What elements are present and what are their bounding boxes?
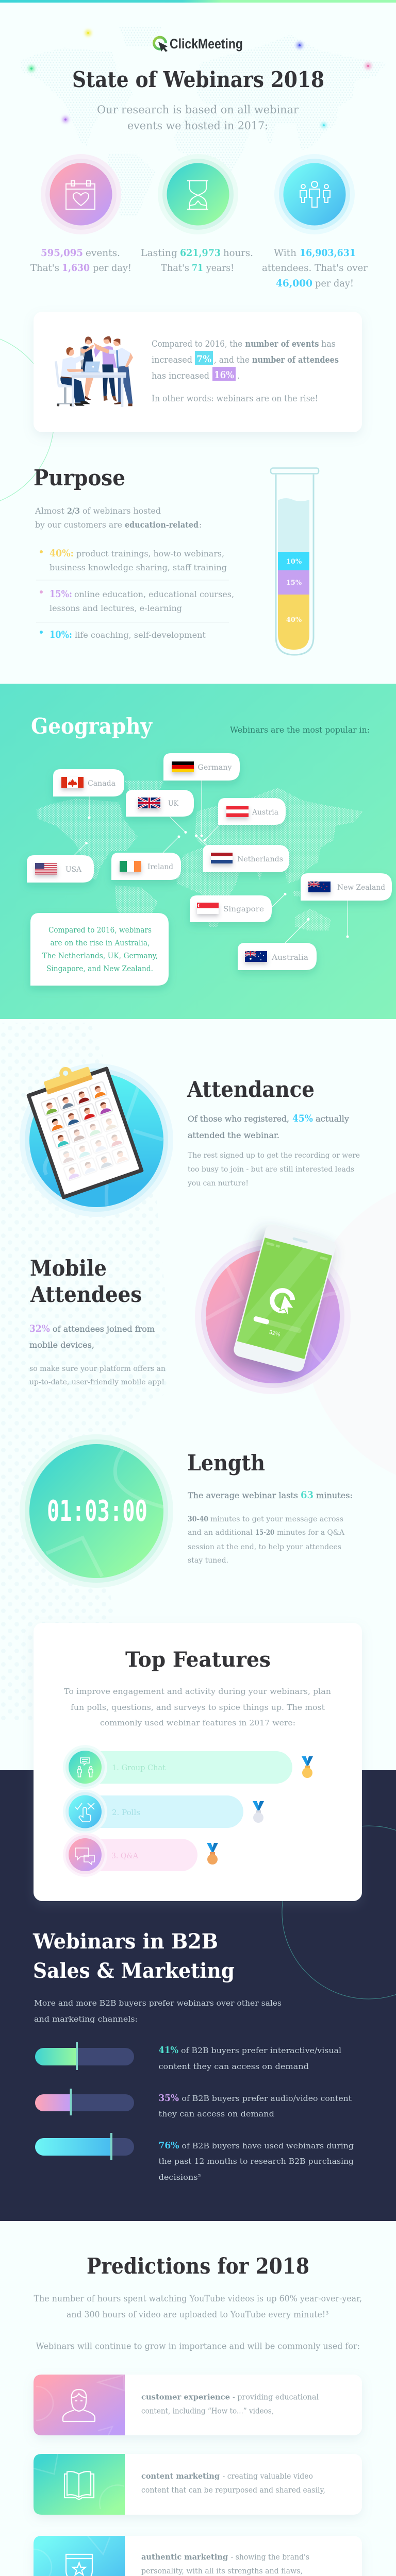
callout: rising countries (30, 913, 169, 986)
icon: person (63, 2389, 95, 2421)
lead text (188, 1113, 349, 1140)
card: customer experience (34, 2375, 362, 2435)
icon: three people (274, 154, 355, 234)
glowing map dots (28, 30, 371, 128)
lead text: 32% (29, 1323, 50, 1334)
detail text: up-to-date, user-friendly mobile app! (29, 1378, 164, 1386)
country: New Zealand (301, 873, 392, 901)
country: Austria (218, 798, 286, 825)
lead text: The average webinar lasts (188, 1490, 298, 1500)
comparison text: has increased (152, 371, 209, 381)
stat text: 76% (159, 2140, 354, 2182)
icon: hourglass (158, 154, 238, 234)
country: Canada (53, 769, 124, 796)
stat text: 35%: 35% (159, 2093, 179, 2104)
subtitle (97, 104, 299, 132)
stat text: hours: 621,973 (180, 247, 221, 259)
feature bar: polls (63, 1790, 264, 1834)
stat text: events: 1,630 (62, 262, 90, 274)
logo: ClickMeeting (170, 36, 243, 52)
stat text: attendees: 16,903,631 (300, 247, 356, 259)
panel: comparison card (34, 312, 362, 432)
card: authentic marketing: authentic marketing (141, 2552, 228, 2562)
stat text: 35%: they can access on demand (159, 2109, 274, 2119)
feature bar: polls: 2. Polls (112, 1808, 140, 1817)
callout: rising countries: The Netherlands, UK, Germany, (42, 951, 158, 960)
comparison text: In other words: webinars are on the rise! (152, 394, 318, 403)
intro text: commonly used webinar features in 2017 were: (100, 1718, 295, 1727)
lead text: minutes: (316, 1490, 353, 1500)
feature bar: Q&A (63, 1833, 218, 1877)
heading: Geography (31, 714, 153, 739)
country: Ireland (111, 853, 181, 880)
intro text: fun polls, questions, and surveys to spice things up. The most (71, 1703, 325, 1712)
stat text: 76%: the past 12 months to research B2B purchasing (159, 2157, 354, 2166)
intro text (35, 506, 202, 530)
panel: top features (34, 1623, 362, 1901)
intro text: and marketing channels: (34, 2014, 138, 2024)
card: content marketing: - creating valuable video (223, 2471, 313, 2481)
illustration: digital clock on green circle (20, 1434, 173, 1588)
stat text: 41%: of B2B buyers prefer interactive/visual (181, 2046, 341, 2055)
country: Canada: Canada (88, 779, 116, 788)
card: authentic marketing: personality, with all its strengths and flaws, (141, 2566, 303, 2575)
heading (32, 1929, 235, 1983)
feature bar: group chat: 1. Group Chat (112, 1763, 166, 1772)
detail text: The rest signed up to get the recording or were (188, 1151, 360, 1160)
stat text: hours (141, 247, 253, 274)
test tube chart (271, 468, 319, 655)
list item: 10%: 10%: (50, 629, 72, 640)
country: UK (126, 790, 194, 817)
stat text: attendees (262, 247, 368, 289)
panel: stat attendees (262, 154, 368, 289)
card: content marketing (34, 2454, 362, 2515)
detail text: and an additional (188, 1529, 253, 1537)
panel: predictions (0, 2253, 396, 2576)
panel: stat events (30, 154, 131, 274)
intro text: by our customers are (35, 520, 122, 530)
intro text: of webinars hosted (82, 506, 161, 516)
stat text: 41% (159, 2045, 341, 2071)
country: USA (27, 855, 94, 883)
detail text: too busy to join - but are still interested leads (188, 1165, 354, 1174)
country: Singapore (190, 895, 272, 922)
stat text: attendees: attendees. That's over (262, 262, 368, 274)
list item: 40%: product trainings, how-to webinars, (76, 549, 224, 558)
list item: 15%: lessons and lectures, e-learning (50, 604, 182, 613)
intro text: The number of hours spent watching YouTube videos is up 60% year-over-year, (34, 2294, 362, 2304)
icon: gold medal (302, 1756, 313, 1778)
test tube chart: 10% (286, 558, 302, 566)
comparison text: increased (152, 355, 192, 365)
feature bar: group chat (63, 1745, 313, 1789)
test tube chart: 15% (286, 579, 302, 587)
card: customer experience: - providing educational (233, 2393, 319, 2402)
country: Netherlands: Netherlands (237, 855, 283, 863)
country: New Zealand: New Zealand (337, 884, 385, 892)
detail text: so make sure your platform offers an (29, 1365, 166, 1373)
icon: open book (64, 2471, 94, 2499)
detail text: you can nurture! (187, 1179, 249, 1188)
icon: shield with star (66, 2554, 92, 2576)
heading: Length (187, 1450, 265, 1476)
intro text: 2/3 (67, 506, 80, 516)
comparison text (152, 339, 339, 403)
dark section background (0, 1770, 396, 2221)
intro text (64, 1687, 331, 1727)
detail text: minutes for a Q&A (277, 1529, 345, 1537)
country: UK: UK (168, 800, 178, 808)
detail text: 30-40 (188, 1515, 208, 1523)
stat text: attendees: 46,000 (276, 278, 312, 289)
panel: webinars in B2B (32, 1929, 354, 2182)
heading: Mobile (30, 1256, 107, 1281)
slider: 76% (35, 2133, 134, 2160)
country: Australia (238, 943, 317, 970)
test tube chart: 40% (286, 616, 302, 624)
list item: 40%: 40%: (50, 548, 74, 559)
stat text: hours: Lasting (141, 247, 177, 259)
country: Netherlands (203, 845, 289, 872)
heading: Predictions for 2018 (87, 2253, 309, 2279)
heading: Attendance (187, 1077, 315, 1102)
heading: Webinars in B2B (32, 1929, 218, 1954)
stat text: events (30, 247, 131, 274)
detail text: stay tuned. (188, 1556, 228, 1565)
panel: geography (0, 684, 396, 1019)
stat text: events: That's (30, 262, 59, 274)
country: Ireland: Ireland (147, 863, 173, 871)
illustration: digital clock on green circle: 01:03:00 (47, 1495, 147, 1528)
illustration: team high five (55, 336, 133, 407)
stat text: 35% (159, 2093, 352, 2119)
illustration: clipboard on blue circle (20, 1054, 173, 1217)
panel: stat hours (141, 154, 253, 274)
panel: attendance (20, 1054, 360, 1217)
icon: silver medal (253, 1801, 264, 1823)
lead text: Of those who registered, (188, 1114, 289, 1124)
stat text: 41%: 41% (159, 2045, 178, 2056)
card: content marketing: content that can be repurposed and shared easily, (141, 2485, 325, 2495)
callout: rising countries: Singapore, and New Zealand. (46, 964, 153, 973)
decorative arc in dark section (282, 1826, 396, 1999)
stat text: events: 595,095 (41, 247, 83, 259)
lead text: of attendees joined from (53, 1324, 155, 1334)
detail text: minutes to get your message across (210, 1515, 343, 1523)
lead text (188, 1489, 353, 1501)
illustration: phone on pink circle: 32% (268, 1329, 281, 1338)
subtitle: events we hosted in 2017: (127, 120, 268, 132)
lead text: 45% (292, 1113, 313, 1124)
detail text (29, 1365, 166, 1386)
heading: Top Features (125, 1648, 271, 1672)
stat text: events: events. (86, 247, 120, 259)
country: Germany (163, 753, 240, 781)
panel: hero header (0, 0, 396, 216)
comparison text: number of events (245, 339, 319, 349)
country: Austria: Austria (252, 808, 278, 817)
detail text: 15-20 (255, 1529, 274, 1537)
card: authentic marketing: - showing the brand's (231, 2552, 309, 2562)
list item: 15%: online education, educational courses, (74, 590, 234, 599)
stat text: hours: years! (206, 262, 234, 274)
dotted world map (37, 781, 364, 938)
map connectors (74, 781, 349, 943)
comparison text: has (321, 339, 336, 349)
illustration: phone on pink circle (195, 1223, 351, 1394)
card: customer experience: content, including “How to...” videos, (141, 2406, 274, 2415)
stat text: hours: hours. (223, 247, 253, 259)
lead text: 63 (301, 1489, 314, 1501)
feature bar: Q&A: 3. Q&A (111, 1851, 138, 1860)
card: customer experience: customer experience (141, 2393, 230, 2402)
lead text: actually (316, 1114, 349, 1124)
card background (34, 1623, 362, 1901)
list item: 40% (40, 548, 227, 572)
heading: Purpose (34, 465, 125, 490)
stat text: attendees: With (274, 247, 296, 259)
detail text (187, 1151, 360, 1188)
intro text: education-related (125, 520, 199, 530)
decorative large dots and right shape (0, 1023, 396, 1721)
highlight: 16%: 16% (214, 369, 234, 381)
country: Singapore: Singapore (223, 905, 264, 913)
stat text: 76%: of B2B buyers have used webinars during (182, 2141, 354, 2150)
stat text: hours: That's (161, 262, 189, 274)
section background (0, 684, 396, 1019)
intro text: and 300 hours of video are uploaded to YouTube every minute!³ (67, 2310, 329, 2320)
stat text: 76%: decisions² (159, 2173, 201, 2182)
intro text: Webinars will continue to grow in importance and will be commonly used for: (36, 2341, 360, 2351)
list item: 15% (40, 588, 234, 613)
icon: bronze medal (207, 1843, 218, 1865)
card: content marketing: content marketing (141, 2471, 220, 2481)
comparison text: , and the (214, 355, 250, 365)
stat text: attendees: per day! (315, 278, 354, 289)
lead text (29, 1323, 155, 1350)
lead text: mobile devices, (29, 1340, 94, 1350)
country: Australia: Australia (271, 954, 308, 962)
stat text: 35%: of B2B buyers prefer audio/video content (182, 2094, 352, 2103)
callout: rising countries: are on the rise in Australia, (51, 938, 150, 947)
heading: Attendees (30, 1282, 142, 1307)
list item: 10%: life coaching, self-development (75, 631, 206, 640)
intro text: : (199, 520, 202, 530)
intro text (34, 2294, 362, 2351)
stat text: 76%: 76% (159, 2140, 179, 2151)
slider: 35% (35, 2089, 134, 2115)
stat text: events: per day! (93, 262, 131, 274)
icon: logo on phone screen (269, 1288, 298, 1317)
callout: rising countries: Compared to 2016, webinars (48, 925, 152, 935)
list item: 10% (40, 629, 206, 640)
panel: mobile attendees (29, 1223, 351, 1394)
slider: 41% (35, 2042, 134, 2070)
comparison text: Compared to 2016, the (152, 339, 242, 349)
comparison text: . (237, 371, 240, 381)
detail text (188, 1515, 345, 1565)
country: Germany: Germany (198, 764, 232, 772)
card: authentic marketing (34, 2536, 362, 2576)
heading (30, 1256, 142, 1307)
icon: calendar with heart (41, 154, 121, 234)
title: State of Webinars 2018 (72, 67, 324, 92)
highlight: 7%: 7% (196, 353, 211, 365)
card background (34, 312, 362, 432)
list item: 40%: business knowledge sharing, staff training (50, 563, 227, 572)
detail text: session at the end, to help your attendees (188, 1543, 341, 1551)
subtitle: Our research is based on all webinar (97, 104, 299, 116)
comparison text: number of attendees (252, 355, 339, 365)
panel: length (20, 1434, 353, 1588)
dotted world map background (20, 26, 386, 216)
heading: Sales & Marketing (33, 1959, 235, 1983)
country: USA: USA (65, 866, 82, 874)
intro text: Almost (35, 506, 65, 516)
top gradient bar (0, 0, 396, 3)
stat text: 41%: content they can access on demand (159, 2062, 309, 2071)
lead text: attended the webinar. (188, 1130, 279, 1140)
intro text: More and more B2B buyers prefer webinars over other sales (34, 1998, 282, 2008)
intro text: Webinars are the most popular in: (230, 725, 370, 735)
intro text: To improve engagement and activity during your webinars, plan (64, 1687, 331, 1696)
decorative arc (0, 339, 54, 501)
list item: 15%: 15%: (50, 588, 72, 600)
intro text (34, 1998, 282, 2024)
stat text: hours: 71 (192, 262, 203, 274)
panel: purpose (34, 465, 319, 655)
